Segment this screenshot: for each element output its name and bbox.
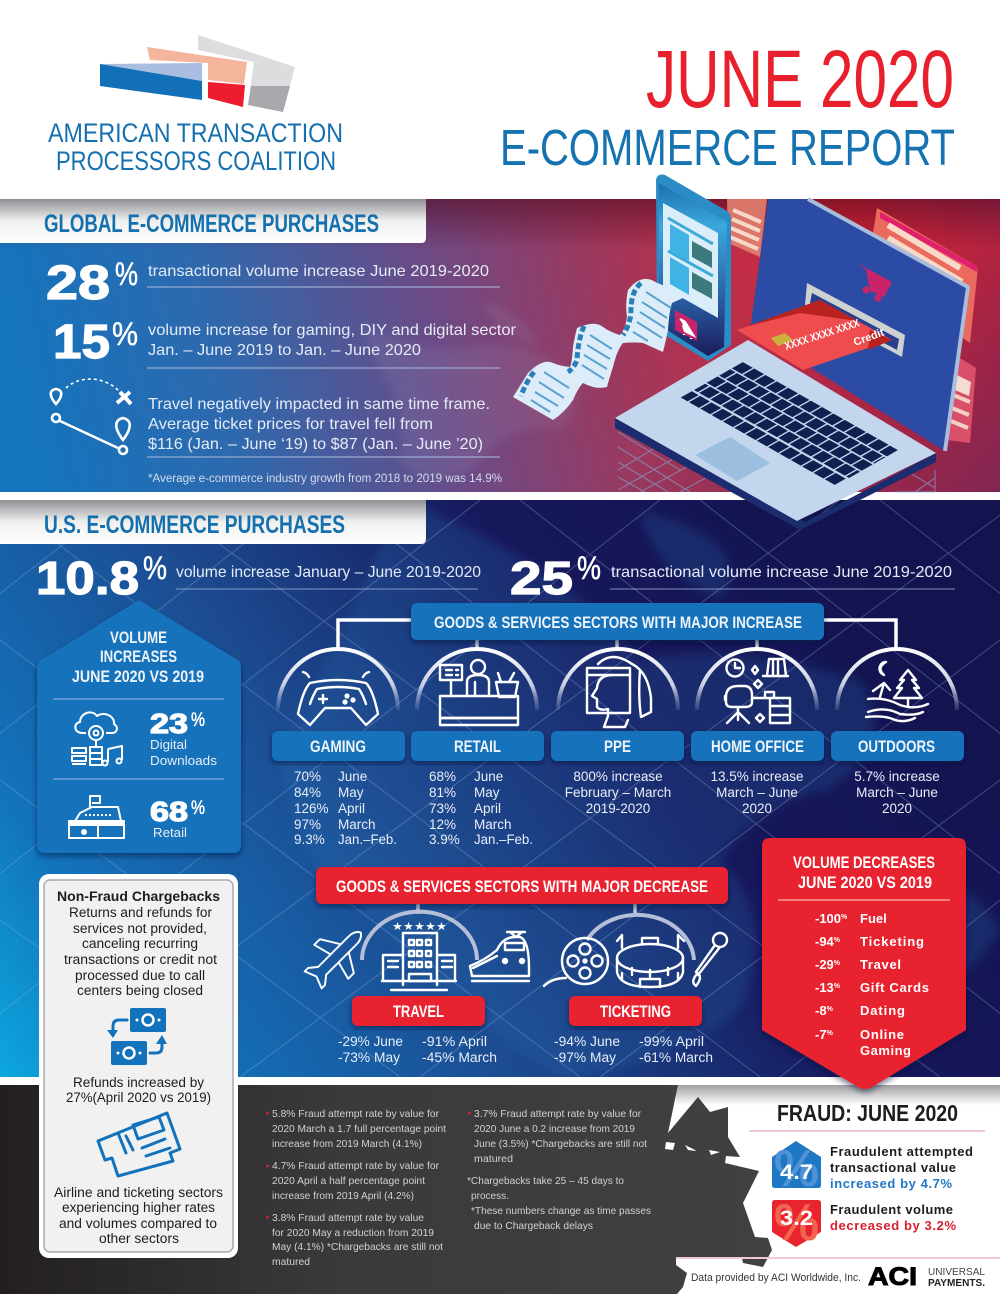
stat: 23% digital downloads: Downloads	[150, 753, 218, 768]
list: fraud rates column two: 3.7% Fraud attempt rate by value for	[474, 1108, 641, 1120]
list: fraud rates column one: matured	[272, 1256, 310, 1268]
list: fraud rates column two: *These numbers change as time passes	[471, 1205, 651, 1217]
stat: 28%: transactional volume increase June 2019-2020	[148, 263, 489, 280]
text block: travel impact: $116 (Jan. – June ‘19) to $87 (Jan. – June ’20)	[148, 436, 483, 453]
icon: cloud downloads	[72, 712, 122, 766]
text: home office detail	[710, 769, 804, 816]
list: volume decreases: %	[834, 960, 841, 967]
text: home office detail: March – June	[716, 785, 798, 800]
icon: cart on screen	[858, 263, 892, 297]
panel: non-fraud chargebacks: Refunds increased by	[73, 1075, 204, 1090]
icon: retail checkout	[440, 660, 518, 725]
list: retail: June	[474, 769, 503, 784]
icon: hotel	[382, 921, 456, 990]
sector: gaming	[272, 649, 405, 847]
list: volume decreases: %	[841, 914, 848, 921]
panel: US e-commerce background	[0, 500, 1000, 1077]
laptop lid	[750, 199, 968, 451]
list: retail: March	[474, 817, 512, 832]
card slot	[805, 283, 905, 357]
list: ticketing	[554, 1034, 713, 1065]
icon: train	[470, 932, 529, 981]
list: fraud rates column one: 4.7% Fraud attempt rate by value for	[272, 1160, 439, 1172]
stat: 10.8%: volume increase January – June 2019-2020	[176, 564, 481, 581]
panel: non-fraud chargebacks: Returns and refunds for	[69, 905, 212, 920]
sector: outdoors: OUTDOORS	[858, 738, 935, 756]
illustration: laptop, phone, receipt and credit card	[513, 175, 978, 530]
stat: 15%: volume increase for gaming, DIY and digital sector	[148, 322, 517, 339]
text: outdoors detail: 5.7% increase	[854, 769, 940, 784]
banner: sectors with major increase: GOODS & SERVICES SECTORS WITH MAJOR INCREASE	[434, 613, 802, 632]
list: retail: 73%	[429, 801, 456, 816]
list: travel: -73% May	[338, 1050, 400, 1065]
text block: travel impact: Travel negatively impacted in same time frame.	[148, 396, 490, 413]
stat: 68% retail: %	[191, 798, 205, 819]
list: fraud rates column two: process.	[471, 1190, 509, 1202]
connector: decrease sectors	[418, 904, 635, 914]
list: fraud rates column one: 5.8% Fraud attempt rate by value for	[272, 1108, 439, 1120]
sector: ticketing: TICKETING	[600, 1003, 671, 1021]
text: PPE detail: 800% increase	[573, 769, 663, 784]
list: ticketing: -97% May	[554, 1050, 616, 1065]
sector: travel	[296, 912, 529, 1065]
list: volume decreases: -8	[815, 1003, 827, 1018]
list: gaming	[294, 769, 397, 847]
list: volume decreases: Travel	[860, 957, 901, 972]
list: volume decreases: Online	[860, 1027, 904, 1042]
list: gaming: 9.3%	[294, 832, 325, 847]
logo: American Transaction Processors Coalition: AMERICAN TRANSACTION	[48, 118, 343, 148]
stat: 68% retail: 68	[150, 796, 188, 827]
list: travel: -45% March	[422, 1050, 497, 1065]
icon: face shield	[587, 657, 651, 727]
title	[500, 34, 955, 176]
receipt	[513, 279, 683, 420]
fraud stat: 3.2 volume	[772, 1194, 956, 1252]
panel: non-fraud chargebacks: Airline and ticketing sectors	[54, 1185, 223, 1200]
fraud stat: 3.2 volume: Fraudulent volume	[830, 1202, 953, 1217]
footer credit: Data provided by ACI Worldwide, Inc.	[691, 1272, 861, 1284]
list: travel: -29% June	[338, 1034, 403, 1049]
list: volume decreases: -94	[815, 934, 834, 949]
panel: non-fraud chargebacks: Non-Fraud Chargebacks	[57, 889, 220, 904]
list: volume decreases: %	[834, 937, 841, 944]
list: travel: -91% April	[422, 1034, 487, 1049]
banner: sectors with major decrease	[316, 867, 728, 904]
sector: home office	[691, 649, 824, 816]
laptop base	[615, 340, 936, 530]
list: travel	[338, 1034, 497, 1065]
list: fraud rates column one: for 2020 May a reduction from 2019	[272, 1227, 434, 1239]
panel: volume decreases: JUNE 2020 VS 2019	[798, 874, 932, 892]
list: fraud rates column two	[467, 1108, 651, 1232]
list: fraud rates column two: *Chargebacks take 25 – 45 days to	[467, 1175, 624, 1187]
fraud stat: 3.2 volume: %	[774, 1194, 819, 1252]
list: volume decreases: Gift Cards	[860, 980, 929, 995]
fraud stat: 4.7 attempted: 4.7	[780, 1161, 813, 1184]
sector: PPE: PPE	[604, 738, 631, 756]
list: retail: 12%	[429, 817, 456, 832]
phone	[656, 175, 731, 361]
fraud stat: 4.7 attempted: %	[774, 1140, 819, 1198]
list: gaming: March	[338, 817, 376, 832]
list: gaming: 84%	[294, 785, 321, 800]
list: retail: May	[474, 785, 500, 800]
footnote: *Average e-commerce industry growth from 2018 to 2019 was 14.9%	[148, 473, 502, 485]
list: volume decreases: Fuel	[860, 911, 887, 926]
list: fraud rates column one: 2020 April a half percentage point	[272, 1175, 425, 1187]
footer credit: ACI	[868, 1263, 917, 1291]
sector: travel: TRAVEL	[393, 1003, 444, 1021]
panel: non-fraud chargebacks: 27%(April 2020 vs 2019)	[66, 1090, 211, 1105]
fraud stat: 4.7 attempted: transactional value	[830, 1160, 956, 1175]
text: outdoors detail: March – June	[856, 785, 938, 800]
logo: American Transaction Processors Coalition	[48, 35, 343, 176]
credit card	[737, 300, 892, 370]
list: gaming: 126%	[294, 801, 329, 816]
stat: 28%: %	[115, 256, 138, 292]
list: fraud rates column two: due to Chargeback delays	[474, 1220, 593, 1232]
text: outdoors detail: 2020	[882, 801, 912, 816]
credit card: Credit	[852, 327, 886, 349]
connector: increase sectors	[338, 620, 896, 650]
panel heading: global e-commerce purchases: GLOBAL E-COMMERCE PURCHASES	[44, 210, 379, 238]
list: volume decreases: -7	[815, 1027, 827, 1042]
fraud stat: 4.7 attempted: Fraudulent attempted	[830, 1144, 973, 1159]
list: volume decreases	[815, 911, 929, 1058]
list: fraud rates column one: increase from 2019 April (4.2%)	[272, 1190, 414, 1202]
top shadow on fraud area	[676, 1085, 1000, 1105]
stat: 10.8%	[36, 550, 481, 604]
list: fraud rates column one: increase from 2019 March (4.1%)	[272, 1138, 422, 1150]
icon: film reel	[544, 938, 608, 986]
stat: 68% retail: Retail	[153, 825, 187, 840]
list: gaming: 70%	[294, 769, 321, 784]
text block: travel impact: Average ticket prices for travel fell from	[148, 416, 433, 433]
list: fraud rates column two: 2020 June a 0.2 increase from 2019	[474, 1123, 635, 1135]
icon: microphone	[693, 933, 727, 986]
panel: fraud notes dark background with silhouette	[0, 1085, 772, 1294]
panel: non-fraud chargebacks: other sectors	[99, 1231, 179, 1246]
stat: 15%	[53, 316, 517, 369]
stat: 25%: transactional volume increase June 2019-2020	[611, 564, 952, 581]
stat: 23% digital downloads: Digital	[150, 737, 187, 752]
stat: 10.8%: %	[143, 550, 167, 586]
list: volume decreases: Dating	[860, 1003, 905, 1018]
sector: outdoors	[831, 649, 964, 816]
stat: 68% retail	[150, 796, 205, 840]
list: gaming: Jan.–Feb.	[338, 832, 397, 847]
banner: sectors with major decrease: GOODS & SERVICES SECTORS WITH MAJOR DECREASE	[336, 877, 708, 896]
panel: volume increases: INCREASES	[100, 648, 177, 666]
list: retail	[429, 769, 533, 847]
list: fraud rates column one: 2020 March a 1.7 full percentage point	[272, 1123, 446, 1135]
list: gaming: 97%	[294, 817, 321, 832]
panel heading: U.S. e-commerce purchases: U.S. E-COMMERCE PURCHASES	[44, 511, 345, 539]
icon: cash register	[69, 796, 124, 838]
list: retail: April	[474, 801, 501, 816]
sector: home office: HOME OFFICE	[711, 738, 804, 756]
fraud stat: 3.2 volume: 3.2	[780, 1207, 813, 1230]
panel: non-fraud chargebacks: services not provided,	[73, 921, 207, 936]
footer credit	[691, 1263, 985, 1291]
panel: non-fraud chargebacks: and volumes compared to	[59, 1216, 217, 1231]
sector: gaming: GAMING	[310, 738, 366, 756]
stat: 28%: 28	[46, 257, 110, 310]
panel: non-fraud chargebacks	[39, 874, 238, 1258]
banner: sectors with major increase	[411, 603, 824, 640]
stat: 23% digital downloads	[150, 708, 218, 768]
text: home office detail: 13.5% increase	[710, 769, 804, 784]
credit card: XXXX XXXX XXXX	[783, 317, 862, 353]
fraud stat: 4.7 attempted: increased by 4.7%	[830, 1176, 952, 1191]
text: home office detail: 2020	[742, 801, 772, 816]
logo: American Transaction Processors Coalition: PROCESSORS COALITION	[56, 146, 336, 176]
icon: airplane	[296, 915, 378, 997]
panel: non-fraud chargebacks: transactions or credit not	[64, 952, 217, 967]
list: volume decreases: Ticketing	[860, 934, 924, 949]
laptop reflection grid	[618, 432, 935, 492]
list: volume decreases: -100	[815, 911, 841, 926]
panel: volume decreases	[762, 838, 966, 1089]
list: volume decreases: -29	[815, 957, 834, 972]
stat: 15%: 15	[53, 316, 110, 369]
text: PPE detail: February – March	[565, 785, 671, 800]
list: ticketing: -99% April	[639, 1034, 704, 1049]
panel: volume increases	[37, 600, 241, 853]
stat: 25%	[510, 550, 955, 604]
list: retail: 3.9%	[429, 832, 460, 847]
list: volume decreases: %	[827, 1006, 834, 1013]
list: fraud rates column one: 3.8% Fraud attempt rate by value	[272, 1212, 424, 1224]
floating window: right bottom	[947, 358, 976, 443]
stat: 23% digital downloads: %	[191, 710, 205, 731]
sector: ticketing	[544, 915, 727, 1065]
footer credit: PAYMENTS.	[928, 1277, 985, 1289]
panel: non-fraud chargebacks: canceling recurring	[82, 936, 198, 951]
icon: refund money exchange	[107, 1008, 167, 1065]
list: retail: 81%	[429, 785, 456, 800]
stat: 25%: %	[577, 550, 601, 586]
stat: 23% digital downloads: 23	[150, 708, 188, 739]
list: gaming: May	[338, 785, 364, 800]
stat: 15%: %	[112, 316, 138, 352]
panel: non-fraud chargebacks: experiencing higher rates	[62, 1200, 215, 1215]
list: retail: Jan.–Feb.	[474, 832, 533, 847]
icon: tickets	[98, 1113, 180, 1176]
panel: non-fraud chargebacks: processed due to call	[75, 968, 205, 983]
divider: footer	[676, 1257, 1000, 1259]
text: PPE detail: 2019-2020	[586, 801, 650, 816]
list: fraud rates column two: matured	[474, 1153, 513, 1165]
footer credit: UNIVERSAL	[928, 1266, 985, 1278]
panel: non-fraud chargebacks: centers being closed	[77, 983, 203, 998]
fraud stat: 3.2 volume: decreased by 3.2%	[830, 1218, 956, 1233]
text block: travel impact	[147, 396, 500, 457]
icon: travel route	[51, 379, 131, 454]
panel heading: global e-commerce purchases	[0, 199, 426, 243]
fraud stat: 4.7 attempted	[772, 1140, 973, 1198]
panel heading: U.S. e-commerce purchases	[0, 500, 426, 544]
text: PPE detail	[565, 769, 671, 816]
list: volume decreases: Gaming	[860, 1043, 911, 1058]
panel: volume increases: JUNE 2020 VS 2019	[72, 668, 204, 686]
heading: fraud june 2020: FRAUD: JUNE 2020	[777, 1100, 958, 1126]
icon: pink cart badge	[675, 310, 697, 341]
white divider	[0, 1077, 1000, 1085]
sector: PPE	[551, 649, 684, 816]
list: retail: 68%	[429, 769, 456, 784]
list: ticketing: -61% March	[639, 1050, 713, 1065]
list: fraud rates column one	[266, 1108, 446, 1268]
sector: retail	[411, 649, 544, 847]
sector: retail: RETAIL	[454, 738, 501, 756]
text: outdoors detail	[854, 769, 940, 816]
icon: game controller	[298, 672, 378, 725]
stat: 15%: Jan. – June 2019 to Jan. – June 2020	[148, 342, 421, 359]
list: ticketing: -94% June	[554, 1034, 620, 1049]
floating window: right top	[867, 208, 978, 343]
list: volume decreases: %	[834, 983, 841, 990]
list: volume decreases: %	[827, 1030, 834, 1037]
floating window: left	[727, 199, 767, 257]
list: volume decreases: -13	[815, 980, 834, 995]
list: gaming: April	[338, 801, 365, 816]
list: gaming: June	[338, 769, 367, 784]
panel: volume decreases: VOLUME DECREASES	[793, 854, 935, 872]
list: fraud rates column two: June (3.5%) *Chargebacks are still not	[474, 1138, 647, 1150]
icon: stadium	[617, 935, 684, 987]
list: fraud rates column one: May (4.1%) *Chargebacks are still not	[272, 1241, 443, 1253]
panel: volume increases: VOLUME	[110, 629, 167, 647]
keyboard	[686, 365, 892, 482]
stat: 25%: 25	[510, 552, 573, 604]
stat: 28%	[46, 256, 500, 310]
icon: outdoors landscape	[866, 662, 928, 721]
icon: home office desk	[725, 659, 790, 723]
panel: global e-commerce background	[0, 199, 1000, 492]
icon: hotel: ★★★★★	[392, 921, 447, 933]
stat: 10.8%: 10.8	[36, 552, 139, 604]
